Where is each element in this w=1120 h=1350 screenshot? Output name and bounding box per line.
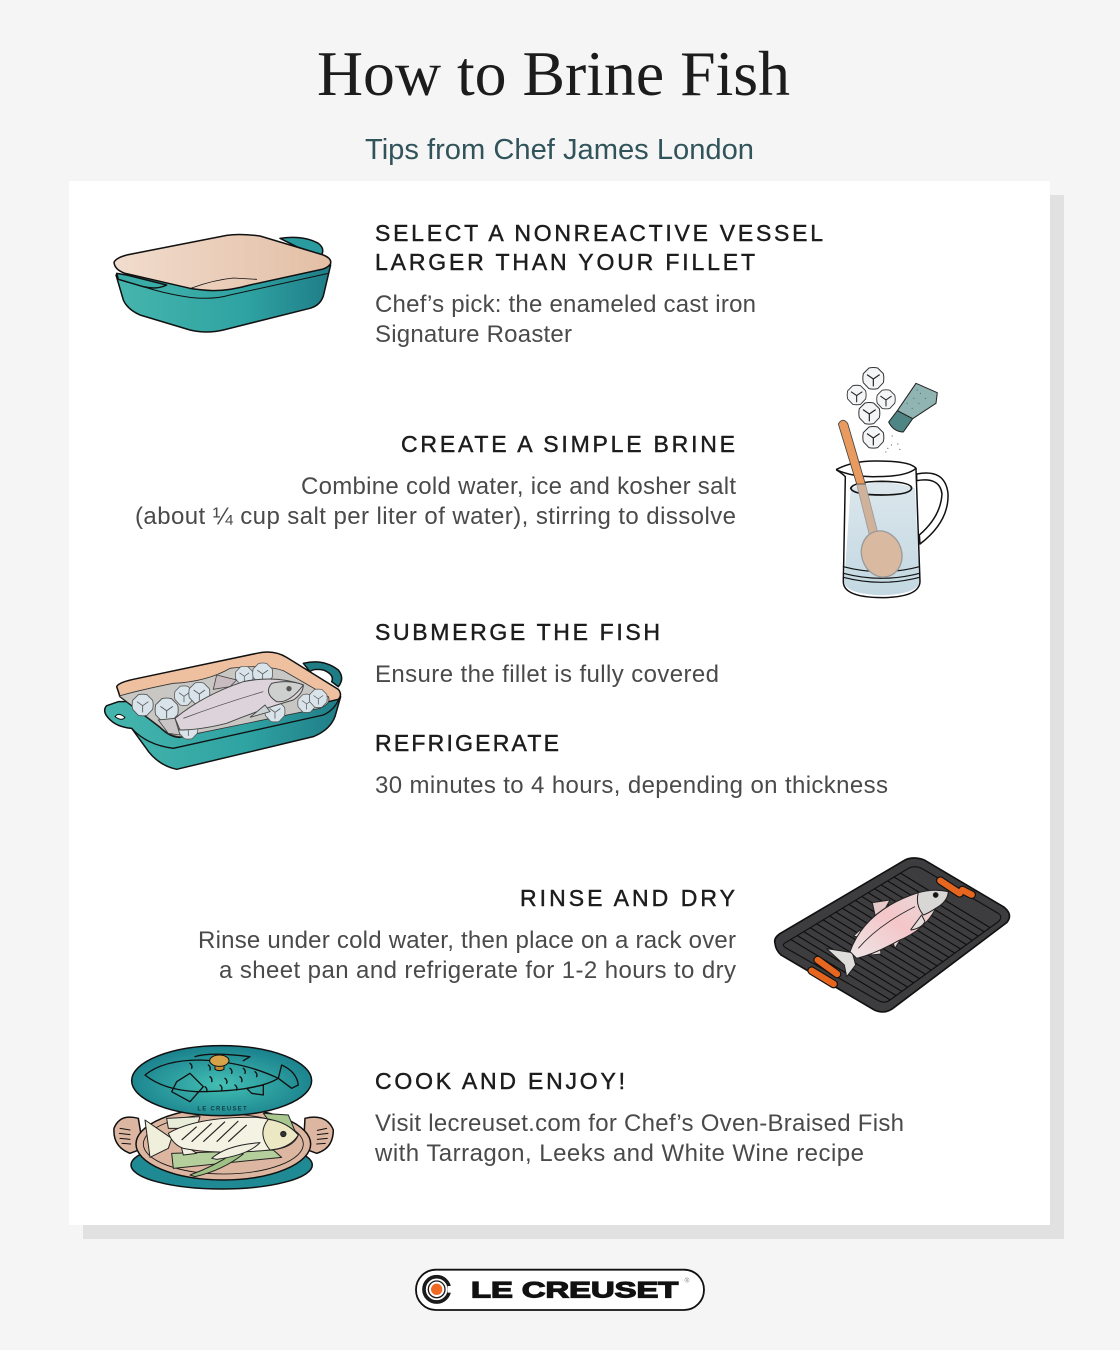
dish handles [114, 1117, 333, 1153]
step 1 heading [375, 220, 823, 275]
water surface [851, 481, 912, 495]
step 2 body [135, 473, 736, 530]
back handle [303, 662, 342, 687]
step 5 heading: COOK AND ENJOY! [375, 1068, 625, 1094]
jug rim front [837, 468, 916, 477]
near handle [117, 273, 167, 288]
cooked fish [145, 1117, 298, 1159]
roaster lip [118, 273, 328, 298]
icon: sheet pan with rack and fish [775, 858, 1013, 1012]
step 2 body: Combine cold water, ice and kosher salt [301, 473, 736, 500]
logo roundel [424, 1277, 454, 1302]
dish body [105, 697, 341, 769]
step 2 body: (about ¼ cup salt per liter of water), stirring to dissolve [135, 503, 736, 530]
lid knob [210, 1055, 229, 1071]
logo: Le Creuset [416, 1270, 704, 1310]
step 4 body [198, 927, 736, 984]
logo pill [416, 1270, 704, 1310]
salt grains [885, 436, 900, 452]
refrigerate heading: REFRIGERATE [375, 730, 559, 756]
inner edge [192, 278, 257, 288]
step 5 body [374, 1110, 904, 1167]
gray interior [119, 667, 329, 737]
leeks [167, 1113, 297, 1177]
tan rim [117, 652, 340, 737]
step 5 body: Visit lecreuset.com for Chef’s Oven-Braised Fish [375, 1110, 904, 1137]
step 4: rinse and dry text [198, 885, 736, 984]
fish [158, 675, 303, 735]
base dish [131, 1141, 312, 1189]
step 4 heading: RINSE AND DRY [520, 885, 735, 911]
step 4 body: Rinse under cold water, then place on a rack over [198, 927, 736, 954]
jug water [844, 482, 919, 595]
wooden spoon [838, 420, 908, 582]
jug glass [837, 461, 920, 598]
dark pan [775, 858, 1009, 1012]
icon: oval fish baker with lid [114, 1046, 333, 1189]
rack bars [791, 873, 990, 1000]
pan inner edge [783, 867, 1001, 1002]
title: How to Brine Fish [317, 38, 790, 109]
far handle [280, 237, 323, 255]
roaster body [116, 265, 331, 332]
lid [132, 1046, 312, 1116]
step 1 body: Chef’s pick: the enameled cast iron [375, 291, 756, 318]
step 2: create brine text [135, 431, 736, 530]
step 3: submerge and refrigerate text [375, 619, 888, 799]
step 2 heading: CREATE A SIMPLE BRINE [401, 431, 735, 457]
front handle hole [115, 714, 125, 719]
salmon [827, 890, 948, 977]
step 1 body: Signature Roaster [375, 321, 572, 348]
lid brand text: LE CREUSET [197, 1107, 247, 1113]
plate inner ring [143, 1114, 303, 1174]
step 1 heading: SELECT A NONREACTIVE VESSEL [375, 220, 823, 246]
ice cubes [847, 367, 895, 448]
jug base bands [843, 567, 920, 582]
jug handle [917, 473, 948, 544]
tan plate [136, 1108, 311, 1180]
refrigerate body: 30 minutes to 4 hours, depending on thickness [375, 772, 888, 799]
submerge heading: SUBMERGE THE FISH [375, 619, 660, 645]
submerge body: Ensure the fillet is fully covered [375, 661, 719, 688]
subtitle: Tips from Chef James London [365, 134, 754, 166]
step 5: cook and enjoy text [374, 1068, 904, 1167]
step 5 body: with Tarragon, Leeks and White Wine recipe [374, 1140, 864, 1167]
icon: pitcher with ice, salt and spoon [837, 367, 948, 598]
icon: roaster with fish on ice [105, 652, 342, 769]
logo wordmark: LE CREUSET [471, 1277, 679, 1302]
step 4 body: a sheet pan and refrigerate for 1-2 hours to dry [219, 957, 736, 984]
white card panel [69, 181, 1050, 1225]
step 1: select vessel text [375, 220, 823, 348]
step 1 heading: LARGER THAN YOUR FILLET [375, 249, 755, 275]
registered mark: ® [685, 1277, 690, 1285]
ice cubes [132, 663, 327, 739]
tan interior [114, 234, 331, 291]
lid fish relief [145, 1054, 298, 1102]
icon: teal roaster [114, 234, 331, 332]
handles [812, 881, 972, 984]
card shadow [83, 195, 1064, 1239]
dish lip line [132, 697, 340, 748]
step 1 body [375, 291, 756, 348]
salt shaker [889, 383, 937, 432]
